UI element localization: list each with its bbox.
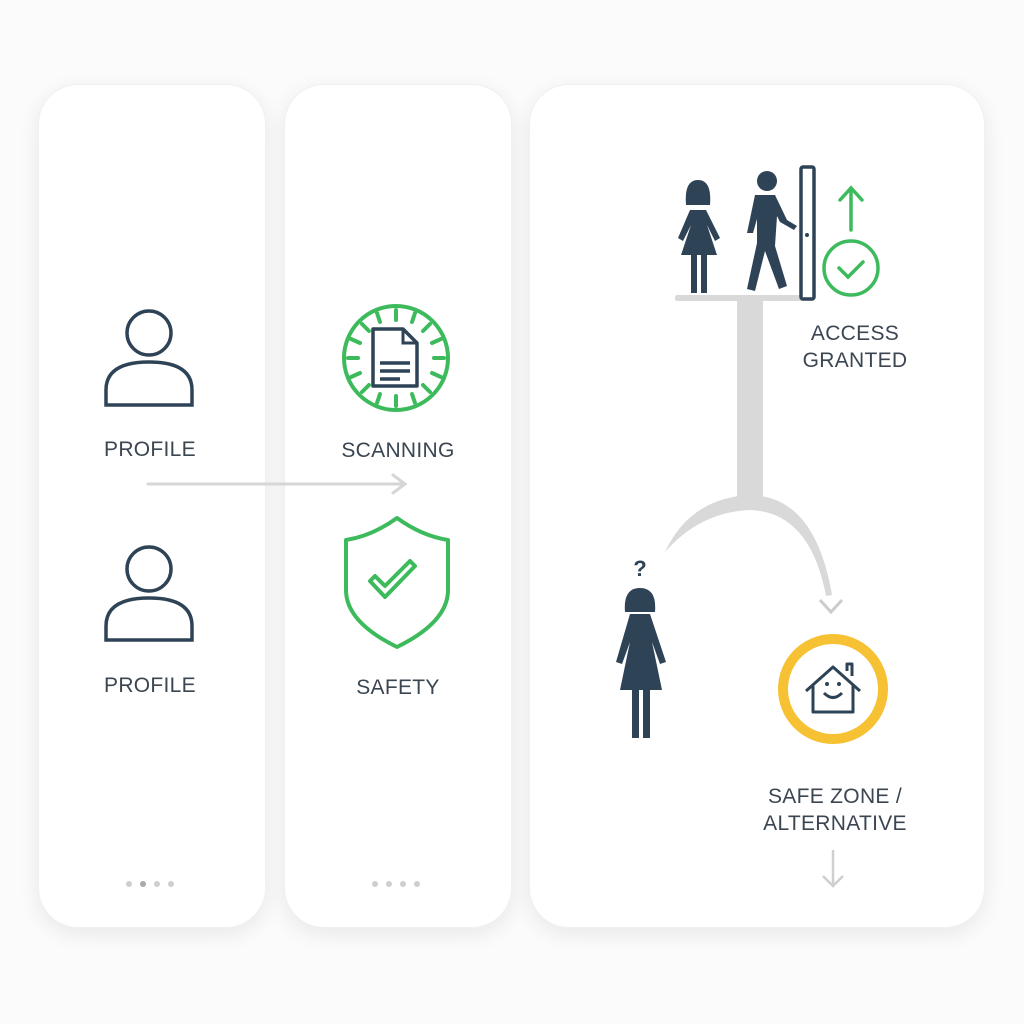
label: safe zone: SAFE ZONE /	[768, 785, 902, 808]
icon: woman questioning	[616, 556, 666, 738]
label: safety: SAFETY	[356, 676, 440, 699]
icon: woman questioning: ?	[633, 556, 647, 581]
arrow: down from safe zone	[823, 850, 843, 886]
dots: pager 1	[126, 881, 174, 887]
icon: safety shield	[346, 518, 448, 647]
icon: woman standing	[678, 180, 720, 293]
dots: pager 2	[372, 881, 420, 887]
panel: profiles	[38, 84, 266, 928]
icon: profile 2	[106, 547, 192, 640]
icon: safe zone house	[783, 639, 883, 739]
icon: door	[801, 167, 814, 299]
panel: scanning and safety	[284, 84, 512, 928]
path: platform and branching arrow	[665, 295, 832, 596]
label: access granted	[803, 322, 907, 372]
icon: profile 1	[106, 311, 192, 405]
label: safe zone	[763, 785, 907, 835]
label: scanning: SCANNING	[341, 439, 455, 462]
icon: scanning document	[344, 306, 448, 410]
label: profile 2: PROFILE	[104, 674, 196, 697]
panel: outcomes	[529, 84, 985, 928]
label: safe zone: ALTERNATIVE	[763, 812, 907, 835]
label: access granted: GRANTED	[803, 349, 907, 372]
label: profile 1: PROFILE	[104, 438, 196, 461]
arrowhead: to safe zone	[820, 600, 842, 612]
arrow: flow across panels	[148, 475, 405, 493]
icon: man walking through door	[747, 171, 797, 291]
icon: up arrow and check	[824, 188, 878, 295]
label: access granted: ACCESS	[811, 322, 899, 345]
